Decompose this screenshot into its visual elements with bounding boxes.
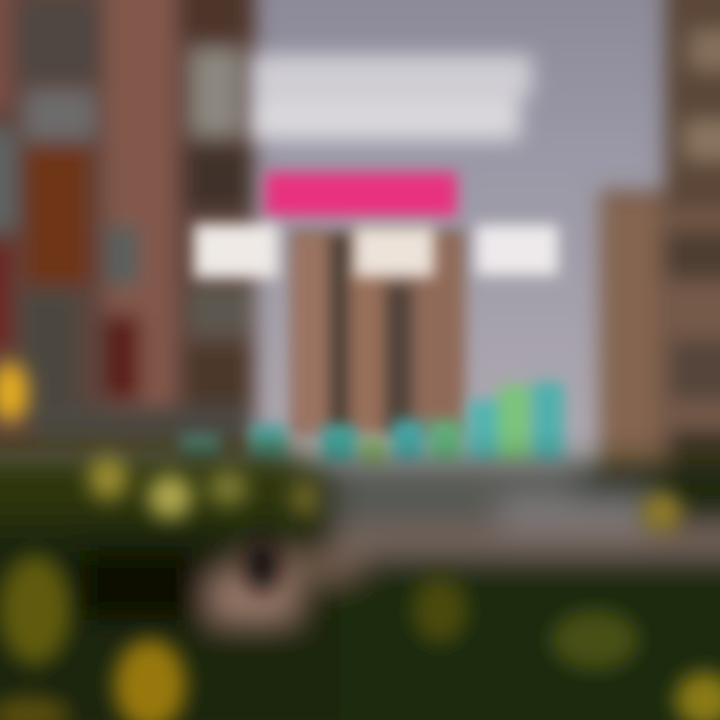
yellow foliage highlights [0,362,720,720]
right building [600,0,720,500]
pink banner [265,172,457,216]
white stat label right [476,225,558,275]
lower street and foliage [0,450,720,720]
title block [252,55,532,140]
bar chart [180,382,564,466]
white stat label center [354,227,434,277]
white stat label left [194,224,278,278]
left building [0,0,255,460]
background sky [0,0,720,560]
center towers [290,230,465,435]
